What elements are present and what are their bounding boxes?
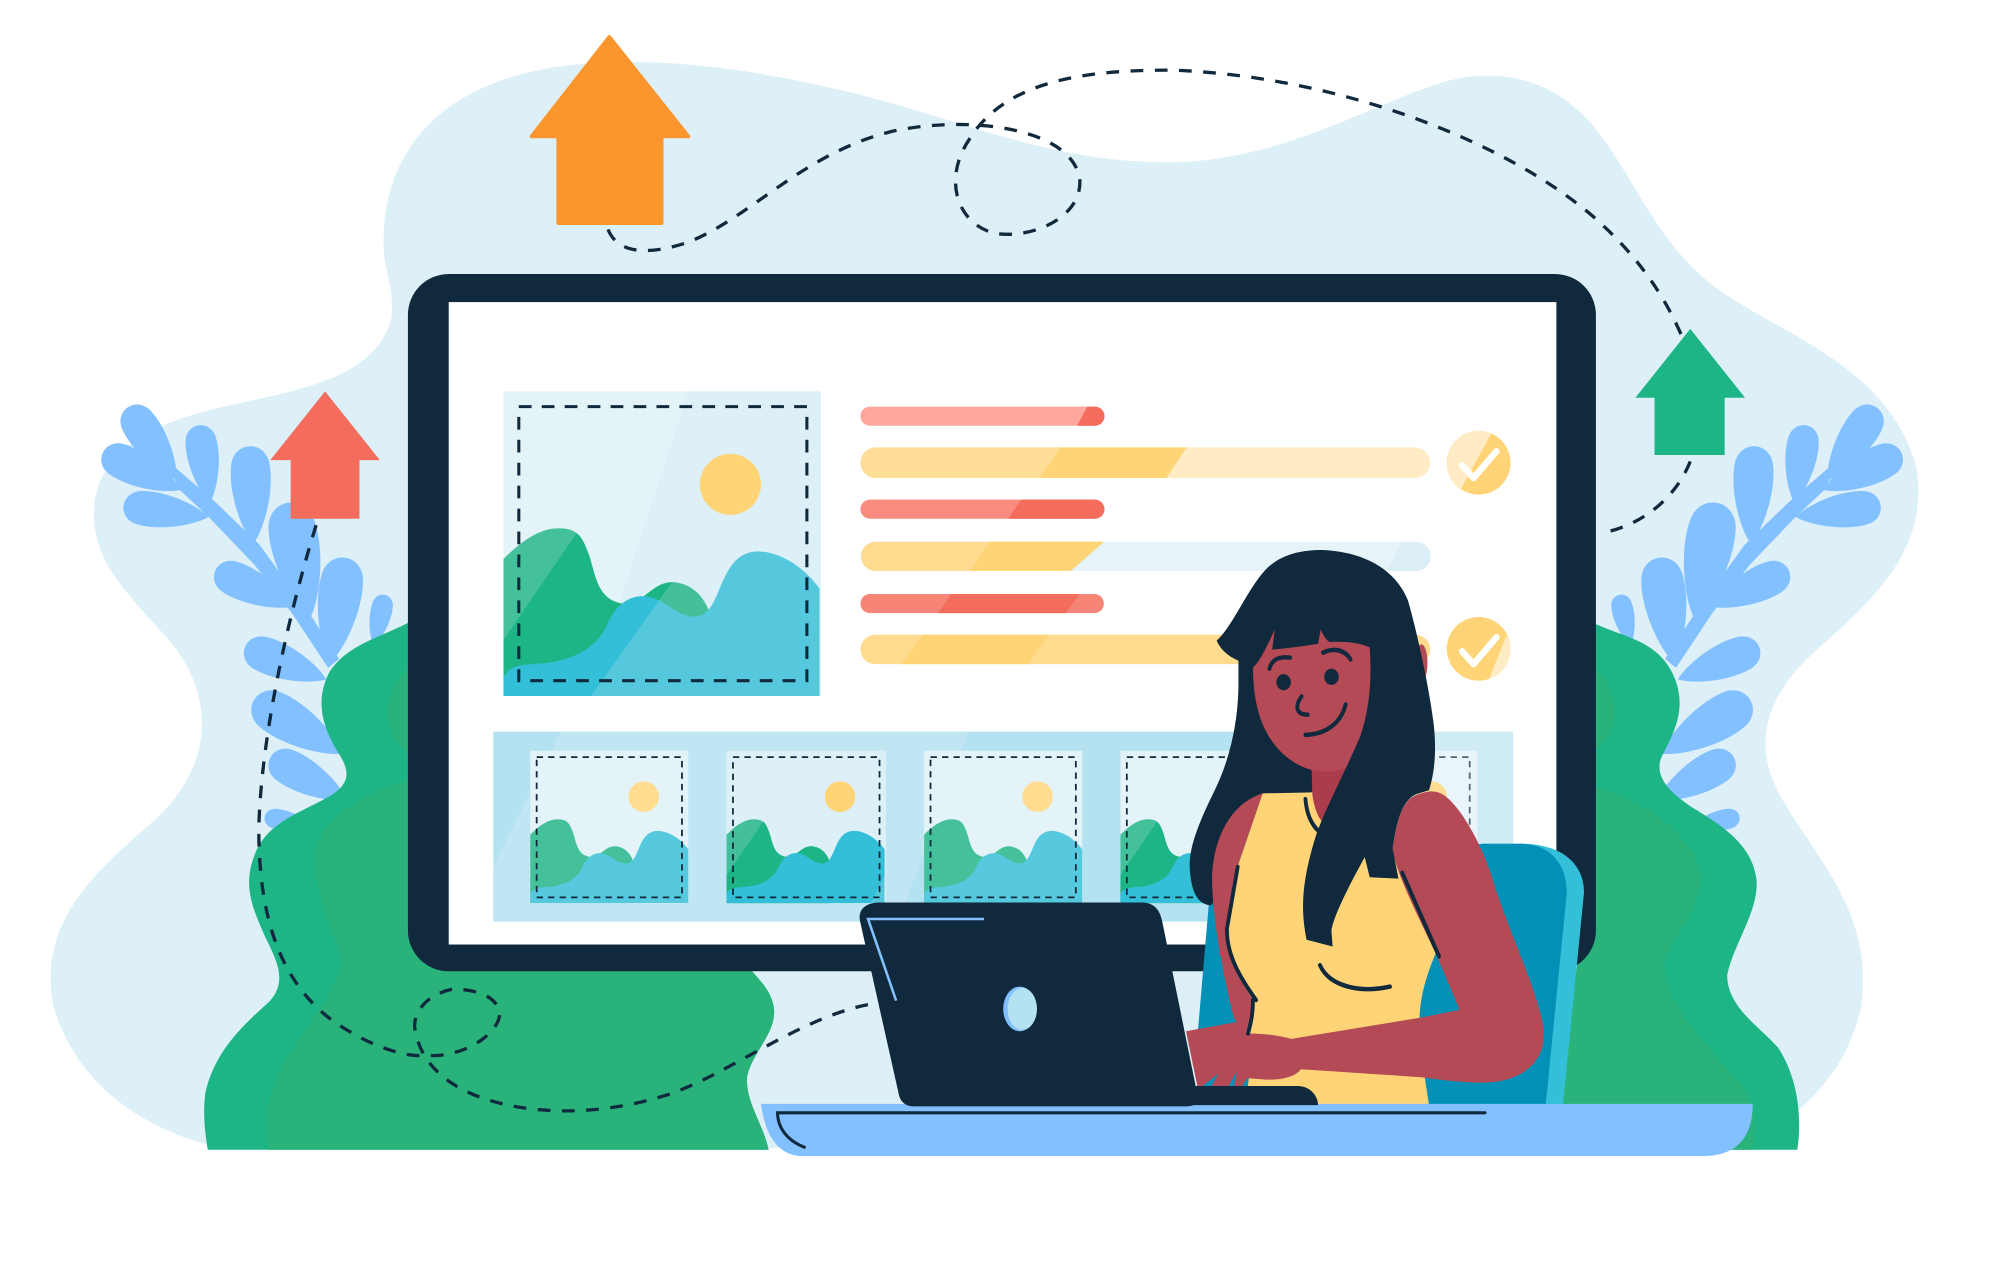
bar 1 — [860, 407, 1105, 426]
check badge 2 — [1447, 617, 1511, 681]
lid highlight — [868, 919, 984, 1001]
laptop — [860, 902, 1318, 1106]
thumbnail 5 — [1318, 751, 1477, 904]
thumbnail 2 — [727, 751, 886, 904]
laptop lid — [860, 902, 1198, 1106]
orange upload arrow — [532, 37, 688, 223]
thumbnail 3 — [924, 751, 1082, 904]
shoulder — [1212, 793, 1263, 1036]
bar 3 — [860, 500, 1105, 519]
green upload arrow — [1635, 329, 1745, 455]
left leafy branch — [95, 397, 395, 837]
red upload arrow — [270, 391, 380, 519]
sun — [700, 454, 761, 515]
woman — [1186, 550, 1544, 1105]
laptop base — [1020, 1086, 1318, 1105]
right leafy branch — [1609, 397, 1909, 837]
face — [1253, 621, 1377, 772]
dashed path: orange arrow loop — [608, 70, 1685, 344]
bar 5 — [860, 594, 1104, 613]
torso — [1225, 792, 1437, 1105]
front hair — [1217, 550, 1435, 946]
bar 4 — [860, 542, 1431, 571]
arm and hand — [1186, 791, 1544, 1087]
finger gaps — [1201, 1071, 1237, 1087]
monitor frame — [408, 274, 1596, 971]
thumbnail strip — [493, 732, 1513, 922]
logo — [1003, 987, 1037, 1031]
bar 2 — [860, 447, 1430, 478]
bar 6 — [860, 635, 1430, 664]
thumbnail 4 — [1120, 751, 1280, 904]
main photo — [503, 391, 821, 696]
check badge 1 — [1447, 431, 1511, 495]
progress bars — [860, 407, 1431, 664]
neck — [1312, 768, 1349, 821]
hills — [503, 528, 820, 696]
dashed path: green arrow — [1609, 461, 1690, 532]
dashed crop frame — [519, 407, 807, 681]
ear — [1415, 644, 1427, 682]
monitor screen — [449, 302, 1556, 945]
right green plant — [1549, 619, 1799, 1150]
chair — [1198, 844, 1584, 1105]
monitor — [408, 274, 1596, 971]
facial features and clothing lines — [1227, 650, 1439, 1033]
dashed path: red arrow loop — [259, 525, 877, 1111]
desk — [761, 1104, 1753, 1156]
back hair — [1190, 634, 1352, 905]
left green plant — [204, 619, 774, 1150]
thumbnail 1 — [530, 751, 688, 904]
